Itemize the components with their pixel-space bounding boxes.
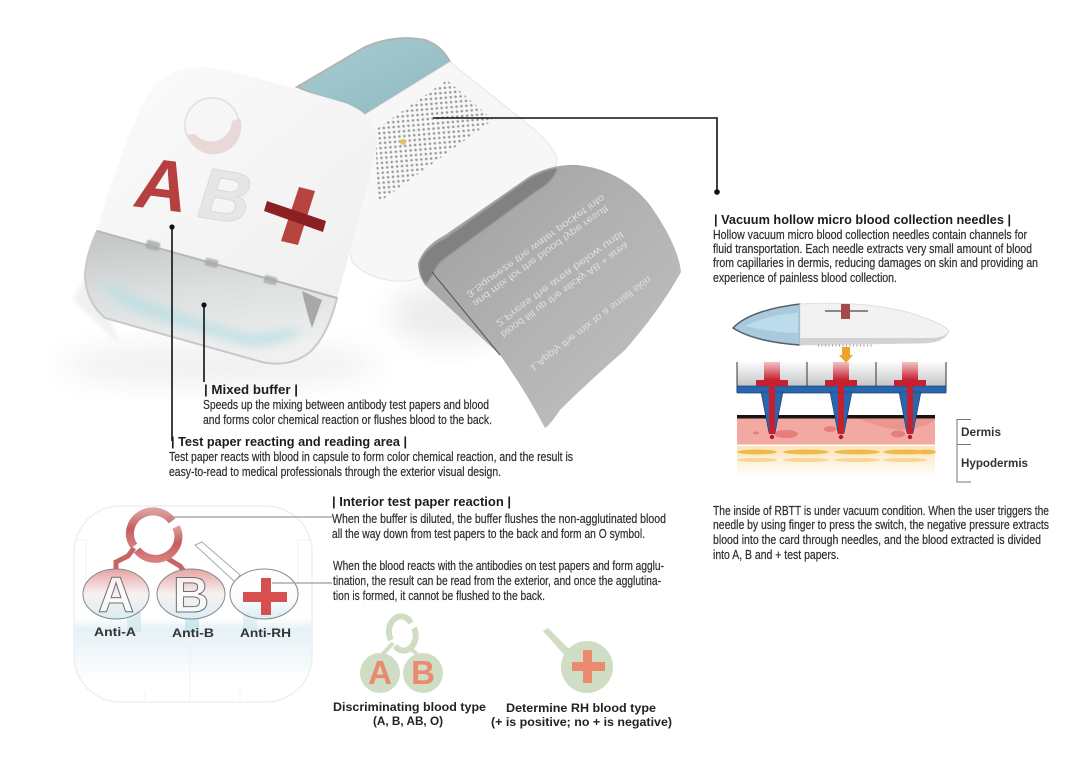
device white top xyxy=(97,67,377,298)
rear device with needle window xyxy=(297,38,557,281)
text: vacuum needles: | Vacuum hollow micro blood collection needles | xyxy=(714,212,1011,227)
text: interior reaction: When the buffer is diluted, the buffer flushes the non-agglutinated blood xyxy=(332,512,666,526)
text: test paper area xyxy=(169,434,573,479)
anti labels: Anti-B xyxy=(172,626,214,640)
label dermis: Dermis xyxy=(961,425,1001,439)
mirrored instruction text: and mix for the blood type result xyxy=(470,202,611,308)
text: mixed buffer: Speeds up the mixing between antibody test papers and blood xyxy=(203,398,489,412)
label hypodermis: Hypodermis xyxy=(961,456,1028,470)
text: interior reaction: tion is formed, it cannot be flushed to the back. xyxy=(333,589,545,603)
mirrored instruction text: 2.Press the area below until xyxy=(493,228,625,328)
text: test paper area: Test paper reacts with blood in capsule to form color chemical reaction, and the result is xyxy=(169,450,573,464)
caption: blood type: Discriminating blood type xyxy=(333,700,486,714)
rear device teal window xyxy=(297,38,450,114)
anti labels xyxy=(94,625,291,640)
mirrored instruction text: 3.Squeeze the water pocket into xyxy=(464,192,607,299)
caption: RH type xyxy=(491,701,672,729)
test paper reaction diagram xyxy=(74,506,332,702)
text: RBTT vacuum explanation xyxy=(713,504,1049,562)
needle 2 xyxy=(825,362,857,439)
channels xyxy=(116,548,186,574)
letter A: A xyxy=(127,144,199,228)
buffer teal glow xyxy=(106,282,305,346)
buffer window xyxy=(85,231,337,364)
micro needle dot matrix xyxy=(376,82,493,202)
side view device xyxy=(733,303,949,346)
skin layers xyxy=(737,415,936,476)
anti-RH handle xyxy=(195,542,240,582)
rear device white body xyxy=(340,62,557,281)
test paper sheet xyxy=(418,165,681,428)
caption: blood type: (A, B, AB, O) xyxy=(373,714,443,728)
icon: RH type xyxy=(543,628,613,693)
bracket xyxy=(957,420,971,482)
text: interior reaction: tination, the result can be read from the exterior, and once the agglutina- xyxy=(333,574,661,588)
text: vacuum needles: experience of painless blood collection. xyxy=(713,271,897,285)
anti-B circle: B xyxy=(173,567,209,623)
anti-A circle: A xyxy=(98,567,134,623)
leader lines xyxy=(172,118,717,441)
caption: RH type: (+ is positive; no + is negative) xyxy=(491,715,672,729)
text: vacuum needles: Hollow vacuum micro blood collection needles contain channels for xyxy=(713,228,1027,242)
text: interior reaction xyxy=(332,494,666,603)
text: mixed buffer: and forms color chemical reaction or flushes blood to the back. xyxy=(203,413,492,427)
anti labels: Anti-RH xyxy=(240,626,291,640)
front device xyxy=(73,67,377,364)
window ledge xyxy=(97,231,337,298)
text: test paper area: easy-to-read to medical professionals through the exterior visual design. xyxy=(169,465,501,479)
text: test paper area: | Test paper reacting and reading area | xyxy=(171,434,407,449)
yellow indicator xyxy=(400,139,406,145)
icon: AB blood type: A xyxy=(368,654,392,691)
mirrored instruction text: 1.Apply the mix to a small skin xyxy=(527,273,653,373)
letter B: B xyxy=(188,154,263,240)
needle 1 xyxy=(756,362,788,439)
anti-A circle xyxy=(83,567,149,623)
text: mixed buffer: | Mixed buffer | xyxy=(204,382,298,397)
press arrow xyxy=(839,347,853,363)
needle cartridge xyxy=(737,362,946,393)
anti labels: Anti-A xyxy=(94,625,136,639)
mirrored instruction text xyxy=(464,192,653,373)
mirrored instruction text: blood fill up the sticky AB + area xyxy=(498,239,631,339)
needle diagram xyxy=(733,303,1028,482)
background shadows xyxy=(60,285,510,387)
leader dots xyxy=(169,189,720,308)
O symbol xyxy=(185,98,241,154)
text: interior reaction: | Interior test paper reaction | xyxy=(332,494,511,509)
text: vacuum needles xyxy=(713,212,1038,285)
anti-B circle xyxy=(157,567,225,623)
reference lines xyxy=(170,517,332,583)
text: interior reaction: all the way down from test papers to the back and form an O symbol. xyxy=(332,527,645,541)
icon: AB blood type xyxy=(360,616,443,693)
caption: RH type: Determine RH blood type xyxy=(506,701,656,715)
caption: blood type xyxy=(333,700,486,728)
device base tab xyxy=(73,268,120,345)
O ring xyxy=(130,511,178,559)
plus symbol xyxy=(264,187,326,245)
text: interior reaction: When the blood reacts with the antibodies on test papers and form agglu- xyxy=(333,559,664,573)
anti-RH circle xyxy=(230,569,298,619)
test paper nubs xyxy=(145,239,278,286)
card outline xyxy=(74,506,312,702)
icon: AB blood type: B xyxy=(411,654,435,691)
window corner fold xyxy=(302,291,322,328)
text: RBTT vacuum explanation: into A, B and + test papers. xyxy=(713,548,839,562)
text: mixed buffer xyxy=(203,382,492,427)
needle 3 xyxy=(894,362,926,439)
